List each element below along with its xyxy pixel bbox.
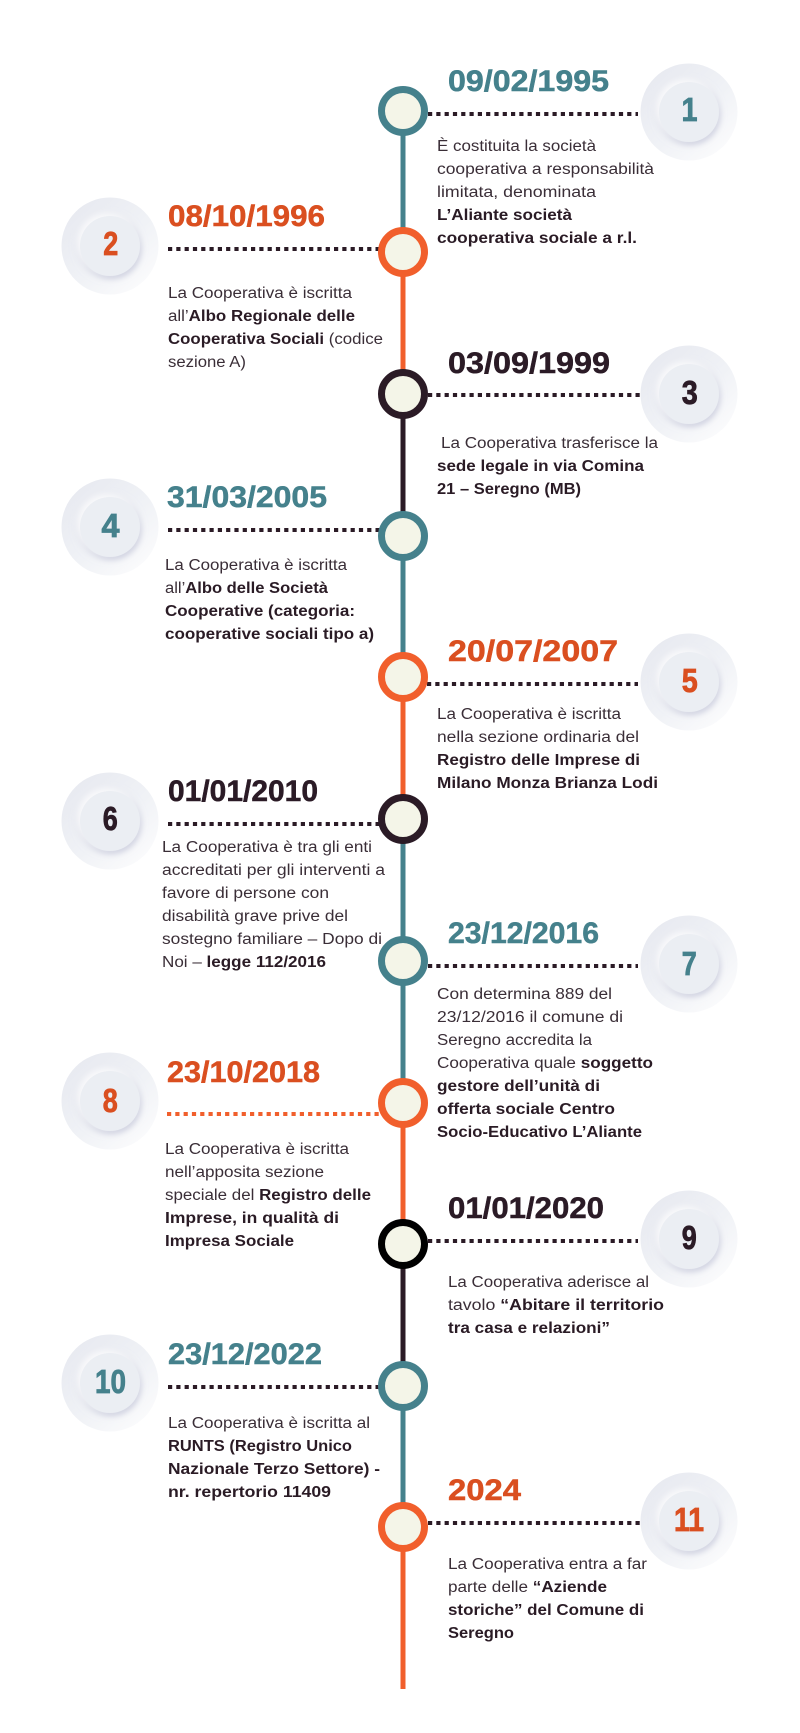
description bbox=[168, 1415, 380, 1501]
number badge 9: 9 bbox=[682, 1219, 697, 1256]
description: nella sezione ordinaria del bbox=[437, 729, 639, 746]
number badge 4 bbox=[62, 478, 158, 576]
connector dots bbox=[168, 822, 380, 826]
date heading: 23/10/2018 bbox=[167, 1056, 320, 1089]
description: Registro delle Imprese di bbox=[437, 752, 640, 769]
connector dots bbox=[428, 112, 638, 116]
description: sostegno familiare – Dopo di bbox=[162, 931, 382, 948]
description: 21 – Seregno (MB) bbox=[437, 481, 581, 498]
description: all’Albo Regionale delle bbox=[168, 308, 355, 325]
timeline item 5: 20/07/2007 bbox=[382, 634, 738, 792]
date heading: 01/01/2020 bbox=[448, 1192, 604, 1225]
connector dots bbox=[428, 1521, 640, 1525]
number badge 6: 6 bbox=[103, 800, 118, 837]
description bbox=[168, 285, 383, 371]
description: nell’apposita sezione bbox=[165, 1164, 324, 1181]
description: L’Aliante società bbox=[437, 207, 572, 224]
number badge 11 bbox=[640, 1472, 738, 1570]
timeline item 9: 01/01/2020 bbox=[382, 1190, 738, 1337]
description: Seregno bbox=[448, 1625, 514, 1642]
description: favore di persone con bbox=[162, 885, 329, 902]
connector dots bbox=[168, 1385, 380, 1389]
description: Cooperativa Sociali (codice bbox=[168, 331, 383, 348]
description: La Cooperativa è iscritta bbox=[168, 285, 352, 302]
timeline item 2: 08/10/1996 bbox=[62, 198, 424, 371]
description bbox=[437, 138, 654, 247]
description: gestore dell’unità di bbox=[437, 1078, 600, 1095]
description: all’Albo delle Società bbox=[165, 580, 328, 597]
description: La Cooperativa è iscritta bbox=[437, 706, 621, 723]
timeline node bbox=[382, 372, 424, 416]
description: Impresa Sociale bbox=[165, 1233, 294, 1250]
date heading: 2024 bbox=[448, 1474, 521, 1507]
description: speciale del Registro delle bbox=[165, 1187, 371, 1204]
number badge 10: 10 bbox=[95, 1363, 126, 1400]
description bbox=[437, 435, 658, 498]
number badge 9 bbox=[640, 1190, 738, 1288]
timeline item 10: 23/12/2022 bbox=[62, 1334, 424, 1501]
timeline node bbox=[382, 1364, 424, 1408]
description: È costituita la società bbox=[437, 138, 596, 155]
connector dots bbox=[428, 393, 640, 397]
description: Seregno accredita la bbox=[437, 1032, 592, 1049]
description: Noi – legge 112/2016 bbox=[162, 954, 326, 971]
number badge 11: 11 bbox=[674, 1501, 704, 1538]
description: cooperativa sociale a r.l. bbox=[437, 230, 637, 247]
number badge 1: 1 bbox=[682, 91, 698, 128]
description: sezione A) bbox=[168, 354, 246, 371]
description: Nazionale Terzo Settore) - bbox=[168, 1461, 380, 1478]
connector dots bbox=[168, 247, 380, 251]
description bbox=[437, 986, 653, 1141]
description: La Cooperativa entra a far bbox=[448, 1556, 647, 1573]
number badge 4: 4 bbox=[102, 507, 120, 544]
description: La Cooperativa è iscritta al bbox=[168, 1415, 370, 1432]
timeline item 1: 09/02/1995 bbox=[382, 64, 738, 247]
number badge 1 bbox=[640, 64, 738, 160]
number badge 5: 5 bbox=[682, 662, 698, 699]
description bbox=[448, 1274, 664, 1337]
description: accreditati per gli interventi a bbox=[162, 862, 385, 879]
description bbox=[448, 1556, 647, 1642]
timeline item 4: 31/03/2005 bbox=[62, 478, 424, 643]
description: nr. repertorio 11409 bbox=[168, 1484, 331, 1501]
number badge 8: 8 bbox=[103, 1082, 118, 1119]
date heading: 23/12/2016 bbox=[448, 917, 599, 950]
description: La Cooperativa è iscritta bbox=[165, 1141, 349, 1158]
timeline item 8: 23/10/2018 bbox=[62, 1052, 424, 1250]
date heading: 23/12/2022 bbox=[168, 1338, 322, 1371]
number badge 7: 7 bbox=[682, 945, 697, 982]
connector dots bbox=[427, 682, 638, 686]
timeline node bbox=[382, 1222, 424, 1266]
description bbox=[165, 557, 374, 643]
number badge 7 bbox=[640, 916, 738, 1012]
description: Con determina 889 del bbox=[437, 986, 612, 1003]
number badge 6 bbox=[62, 772, 158, 870]
connector dots bbox=[428, 1239, 638, 1243]
number badge 2 bbox=[62, 198, 158, 294]
description: parte delle “Aziende bbox=[448, 1579, 607, 1596]
timeline node bbox=[382, 1506, 424, 1548]
description: tavolo “Abitare il territorio bbox=[448, 1297, 664, 1314]
description: tra casa e relazioni” bbox=[448, 1320, 610, 1337]
timeline node bbox=[382, 514, 424, 558]
date heading: 31/03/2005 bbox=[167, 481, 327, 514]
date heading: 09/02/1995 bbox=[448, 65, 609, 98]
description bbox=[437, 706, 658, 792]
number badge 8 bbox=[62, 1052, 158, 1150]
description: Socio-Educativo L’Aliante bbox=[437, 1124, 642, 1141]
timeline item 3: 03/09/1999 bbox=[382, 346, 738, 498]
description: Cooperativa quale soggetto bbox=[437, 1055, 653, 1072]
date heading: 03/09/1999 bbox=[448, 347, 610, 380]
description: 23/12/2016 il comune di bbox=[437, 1009, 623, 1026]
connector dots bbox=[428, 964, 638, 968]
description: limitata, denominata bbox=[437, 184, 596, 201]
timeline item 11: 2024 bbox=[382, 1472, 738, 1642]
description: Imprese, in qualità di bbox=[165, 1210, 339, 1227]
description: storiche” del Comune di bbox=[448, 1602, 644, 1619]
date heading: 08/10/1996 bbox=[168, 200, 325, 233]
connector dots bbox=[168, 528, 380, 532]
description: Cooperative (categoria: bbox=[165, 603, 355, 620]
date heading: 01/01/2010 bbox=[168, 775, 318, 808]
timeline node bbox=[382, 656, 424, 698]
description: RUNTS (Registro Unico bbox=[168, 1438, 352, 1455]
description bbox=[165, 1141, 371, 1250]
timeline node bbox=[382, 90, 424, 132]
date heading: 20/07/2007 bbox=[448, 635, 618, 668]
timeline node bbox=[382, 230, 424, 274]
number badge 2: 2 bbox=[103, 225, 118, 262]
number badge 10 bbox=[62, 1334, 158, 1432]
description: La Cooperativa trasferisce la bbox=[441, 435, 658, 452]
description: cooperativa a responsabilità bbox=[437, 161, 654, 178]
timeline node bbox=[382, 940, 424, 982]
timeline node bbox=[382, 1082, 424, 1124]
description: offerta sociale Centro bbox=[437, 1101, 615, 1118]
number badge 5 bbox=[640, 634, 738, 730]
number badge 3: 3 bbox=[682, 374, 698, 411]
timeline item 6: 01/01/2010 bbox=[62, 772, 424, 971]
description: Milano Monza Brianza Lodi bbox=[437, 775, 658, 792]
description bbox=[162, 839, 385, 971]
description: cooperative sociali tipo a) bbox=[165, 626, 374, 643]
description: La Cooperativa è tra gli enti bbox=[162, 839, 372, 856]
description: sede legale in via Comina bbox=[437, 458, 644, 475]
timeline node bbox=[382, 798, 424, 840]
description: La Cooperativa aderisce al bbox=[448, 1274, 649, 1291]
connector dots bbox=[167, 1112, 380, 1116]
timeline item 7: 23/12/2016 bbox=[382, 916, 738, 1141]
number badge 3 bbox=[640, 346, 738, 442]
description: disabilità grave prive del bbox=[162, 908, 348, 925]
description: La Cooperativa è iscritta bbox=[165, 557, 347, 574]
timeline spine bbox=[400, 111, 406, 1689]
